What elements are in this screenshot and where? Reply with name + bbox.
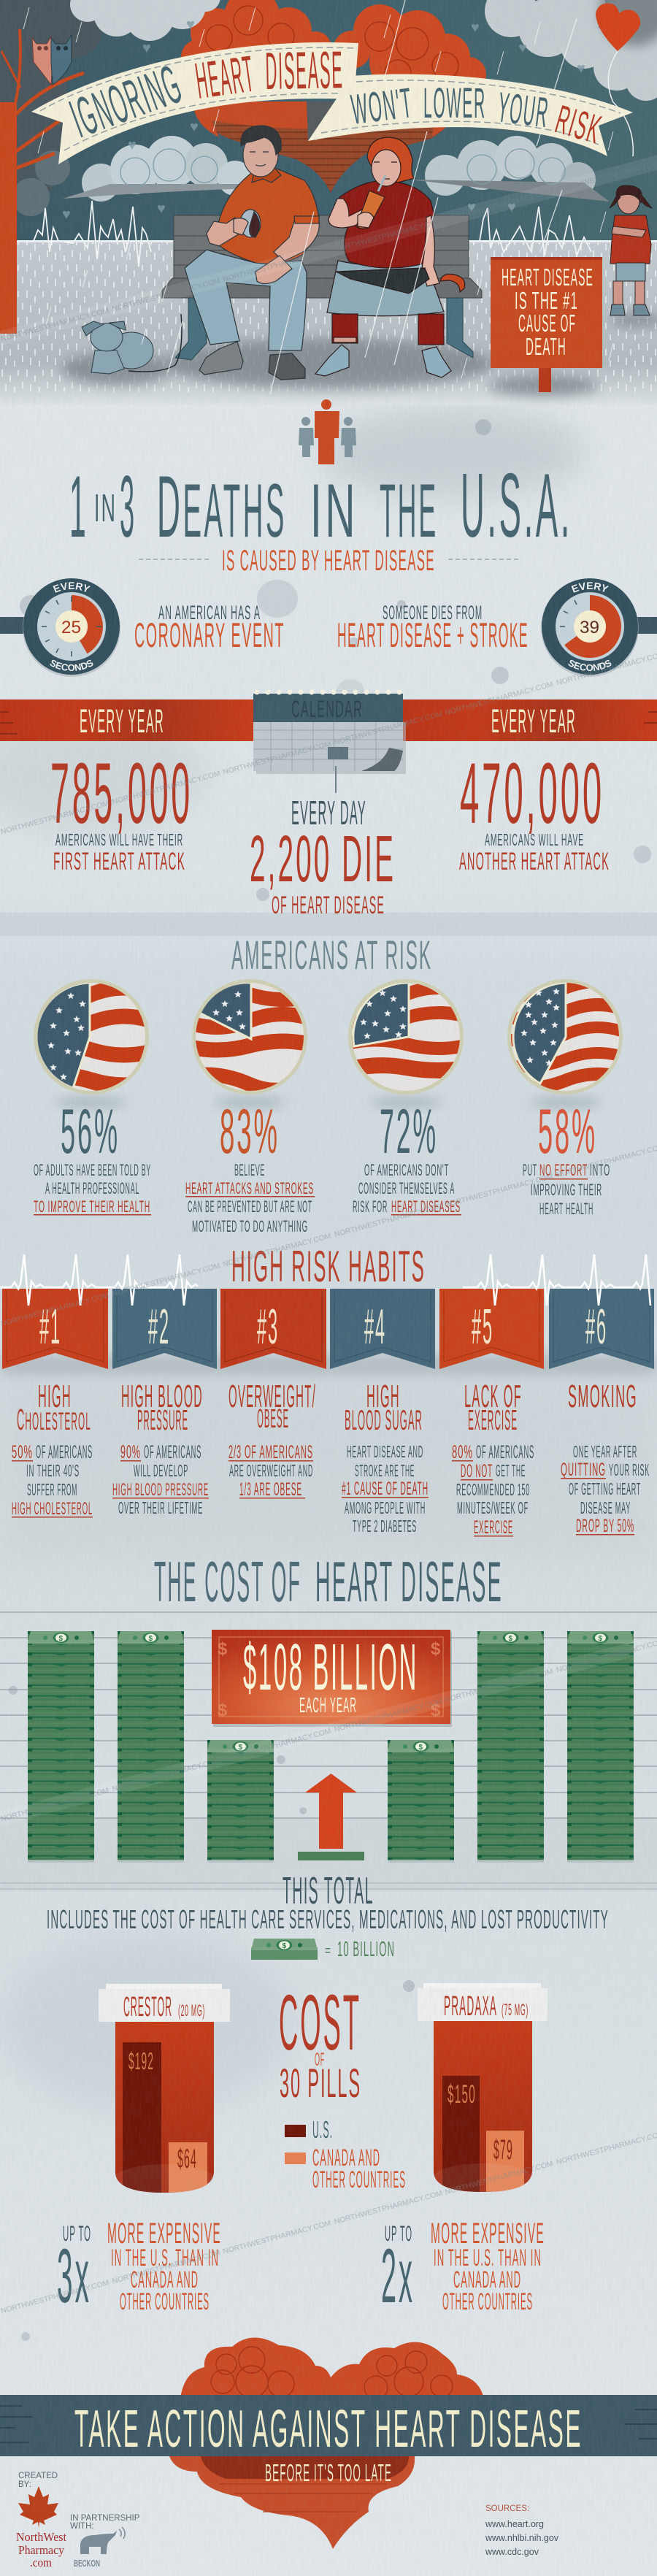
text: OF HEART DISEASE — [272, 892, 385, 919]
text: heart disease and stroke: SOMEONE DIES FROM — [383, 602, 483, 624]
text: CHOLESTEROL — [17, 1403, 91, 1436]
banner right: WON'T — [349, 79, 415, 134]
text: SUFFER FROM — [27, 1480, 77, 1499]
heading: 1 in 3 deaths in the USA: 1 — [69, 458, 88, 556]
text: HEART ATTACKS AND STROKES — [185, 1179, 314, 1197]
owls on branch — [32, 35, 72, 85]
hearts in sky: ♥ — [157, 201, 166, 217]
heading: 1 in 3 deaths in the USA: 3 — [120, 458, 137, 556]
text: PRESSURE — [137, 1405, 188, 1436]
text: ARE OVERWEIGHT AND — [229, 1461, 313, 1480]
heading: cost of 30 pills — [279, 1978, 361, 2106]
text: 30 PILLS — [280, 2060, 361, 2106]
habit: high cholesterol: IN THEIR 40'S — [26, 1461, 80, 1480]
watermark: NORTHWESTPHARMACY.COM — [111, 769, 221, 806]
text: coronary event — [134, 602, 285, 654]
ribbon #2: #2 — [148, 1299, 170, 1354]
heading: 1 in 3 deaths in the USA: THE — [380, 469, 438, 553]
stat: 58%: NO EFFORT — [539, 1161, 588, 1179]
ribbon #1: #1 — [39, 1299, 61, 1354]
red bill: 108 billion: $ — [431, 1639, 441, 1659]
text: TYPE 2 DIABETES — [353, 1517, 417, 1536]
sky — [0, 0, 657, 242]
red bill: 108 billion: $ — [218, 1639, 228, 1659]
woman with drink and umbrella — [315, 137, 465, 377]
watermark: NORTHWESTPHARMACY.COM — [222, 1727, 332, 1764]
text: FIRST HEART ATTACK — [53, 848, 185, 875]
hearts in sky: ♥ — [507, 199, 516, 215]
watermark: NORTHWESTPHARMACY.COM — [111, 1261, 221, 1298]
rain — [23, 0, 613, 394]
ribbon #6: #6 — [585, 1299, 607, 1354]
calendar: CALENDAR — [291, 696, 363, 722]
ribbon #1 — [2, 1289, 108, 1369]
text: up to 2x more expensive: CANADA AND — [453, 2266, 521, 2293]
text: HIGH CHOLESTEROL — [12, 1499, 93, 1519]
ribbon #5: #5 — [472, 1299, 493, 1354]
ribbon #4: #4 — [364, 1299, 386, 1354]
text: LACK OF — [464, 1379, 522, 1414]
watermark: NORTHWESTPHARMACY.COM — [0, 306, 110, 343]
credit: in partnership with beckon: BECKON — [74, 2558, 100, 2569]
watermark: NORTHWESTPHARMACY.COM — [111, 2248, 221, 2285]
hearts in sky: ♥ — [467, 199, 476, 215]
text: up to 2x more expensive: 2x — [381, 2234, 415, 2319]
sign: heart disease is the #1 cause of death — [491, 257, 602, 392]
sign: heart disease is the #1 cause of death: DEATH — [526, 333, 566, 360]
watermark: NORTHWESTPHARMACY.COM — [333, 2189, 443, 2226]
text: BLOOD SUGAR — [345, 1405, 423, 1436]
text: up to 3x more expensive: CANADA AND — [131, 2266, 199, 2293]
watermark: NORTHWESTPHARMACY.COM — [0, 1786, 110, 1823]
habit: high blood pressure: WILL DEVELOP — [134, 1461, 188, 1480]
pie chart flag: 56% — [26, 978, 157, 1108]
clouds middle left — [63, 136, 253, 202]
bottle: crestor — [99, 1984, 230, 2196]
stat: 470,000 another heart attack — [459, 745, 610, 875]
red band right — [403, 699, 657, 741]
stat: 83% — [185, 1097, 315, 1235]
park bench — [162, 215, 482, 360]
heart-shaped tree behind banner — [181, 0, 486, 193]
heading: 1 in 3 deaths in the USA — [69, 456, 572, 556]
watermark: NORTHWESTPHARMACY.COM — [444, 187, 554, 224]
text: OF AMERICANS — [36, 1442, 93, 1463]
ribbon #3 — [220, 1289, 326, 1369]
chart gridlines — [0, 1612, 657, 1818]
hearts in sky: ♥ — [186, 17, 195, 33]
heading: 1 in 3 deaths in the USA: IN — [310, 469, 358, 553]
text: INTO — [590, 1161, 610, 1179]
credit: created by northwest pharmacy: NorthWest — [16, 2530, 66, 2544]
stat: 72%: 72% — [380, 1097, 438, 1167]
legend: bill equals 10 billion — [251, 1938, 395, 1961]
habit: overweight obese: OBESE — [257, 1403, 289, 1433]
calendar — [253, 689, 406, 774]
text: AMERICANS WILL HAVE THEIR — [55, 830, 183, 849]
pie chart flag: 58% — [499, 978, 631, 1108]
pie chart flag: 83% — [184, 978, 315, 1108]
habit: lack of exercise: DO NOT — [461, 1461, 493, 1481]
bottle: crestor: $192 — [128, 2047, 154, 2074]
bottle: crestor: (20 MG) — [178, 2001, 205, 2020]
watermark: NORTHWESTPHARMACY.COM — [111, 276, 221, 313]
stat: 72%: RISK FOR — [353, 1197, 388, 1216]
watermark: NORTHWESTPHARMACY.COM — [444, 1667, 554, 1704]
man eating doughnut — [185, 126, 319, 380]
bottle: pradaxa: PRADAXA — [444, 1991, 497, 2022]
credit: created by northwest pharmacy: BY: — [18, 2480, 31, 2489]
bottle: crestor: CRESTOR — [123, 1992, 172, 2023]
watermark: NORTHWESTPHARMACY.COM — [444, 680, 554, 717]
text: OTHER COUNTRIES — [120, 2288, 210, 2315]
ribbon #3: #3 — [257, 1299, 279, 1354]
text: GET THE — [496, 1461, 526, 1480]
text: HEART DISEASE AND — [347, 1442, 423, 1461]
ribbon #2 — [112, 1289, 217, 1369]
red bill: 108 billion: $ — [218, 1701, 228, 1720]
text: CONSIDER THEMSELVES A — [358, 1179, 455, 1197]
text: coronary event: AN AMERICAN HAS A — [158, 602, 261, 624]
hearts in sky: ♥ — [62, 207, 71, 223]
heading: cost of 30 pills: OF — [315, 2050, 325, 2070]
watermark: NORTHWESTPHARMACY.COM — [333, 1202, 443, 1239]
text: A HEALTH PROFESSIONAL — [45, 1179, 139, 1197]
text: #1 CAUSE OF DEATH — [342, 1479, 429, 1499]
credit: in partnership with beckon: WITH: — [70, 2522, 94, 2531]
text: OVERWEIGHT/ — [228, 1379, 316, 1414]
hearts in sky: ♥ — [128, 137, 137, 153]
text: up to 3x more expensive: UP TO — [63, 2222, 91, 2246]
text: EVERY DAY — [291, 794, 366, 832]
ground — [0, 241, 657, 405]
legend: bill equals 10 billion: = — [325, 1943, 331, 1959]
watermark: NORTHWESTPHARMACY.COM — [0, 799, 110, 836]
stat: 56% — [34, 1097, 151, 1216]
text: up to 3x more expensive — [57, 2217, 221, 2319]
red band left: EVERY YEAR — [80, 702, 164, 740]
red bill: 108 billion — [212, 1630, 452, 1727]
stat: 785,000 first heart attack — [50, 745, 193, 875]
legend: US vs Canada: U.S. — [312, 2116, 333, 2143]
clock: every 25 seconds: EVERY — [53, 582, 91, 593]
text: CORONARY EVENT — [134, 616, 285, 654]
stat: 2,200 die every day — [250, 794, 396, 919]
habit: high blood sugar: HIGH — [366, 1379, 400, 1414]
text: OF ADULTS HAVE BEEN TOLD BY — [34, 1161, 151, 1179]
hearts in sky: ♥ — [190, 119, 199, 135]
text: 785,000 — [50, 745, 193, 842]
banner right: YOUR — [495, 83, 552, 137]
habit: lack of exercise: EXERCISE — [474, 1517, 513, 1538]
clock: every 25 seconds: 25 — [61, 618, 81, 637]
clock: every 39 seconds: 39 — [580, 618, 599, 637]
watermark: NORTHWESTPHARMACY.COM — [0, 2278, 110, 2315]
red band left — [0, 699, 254, 741]
heartbeat lines — [34, 201, 591, 267]
credit: created by northwest pharmacy — [16, 2472, 66, 2569]
text: 1/3 ARE OBESE — [239, 1479, 302, 1500]
stat: 83%: BELIEVE — [234, 1161, 265, 1179]
text: HIGH BLOOD PRESSURE — [112, 1480, 209, 1500]
tree trunk and branches — [0, 29, 84, 334]
watermark: NORTHWESTPHARMACY.COM — [444, 2159, 554, 2196]
text: 2/3 OF AMERICANS — [228, 1442, 313, 1463]
habit: lack of exercise — [452, 1379, 534, 1538]
watermark: NORTHWESTPHARMACY.COM — [222, 2219, 332, 2256]
stat: 56%: 56% — [61, 1097, 120, 1167]
tree foliage — [0, 0, 114, 216]
text: COST — [279, 1978, 361, 2066]
credit: created by northwest pharmacy: Pharmacy — [18, 2543, 64, 2557]
ribbon #6 — [549, 1289, 654, 1369]
ground shadows — [62, 313, 657, 396]
hearts in sky — [62, 17, 585, 223]
heading: 1 in 3 deaths in the USA: IN — [94, 486, 117, 530]
watermark: NORTHWESTPHARMACY.COM — [222, 740, 332, 777]
red bill: 108 billion: EACH YEAR — [299, 1694, 357, 1717]
text: this total: THIS TOTAL — [283, 1870, 374, 1912]
ribbon #5 — [439, 1289, 544, 1369]
credit: created by northwest pharmacy: .com — [30, 2556, 52, 2569]
text: OF AMERICANS DON'T — [364, 1161, 449, 1179]
banner fold — [307, 101, 339, 141]
sign: heart disease is the #1 cause of death: CAUSE OF — [518, 310, 576, 337]
legend: US vs Canada: CANADA AND — [312, 2144, 380, 2171]
chart: money stacks — [28, 1631, 634, 1863]
clouds upper — [70, 0, 220, 41]
text: up to 2x more expensive: UP TO — [385, 2222, 412, 2246]
text: OTHER COUNTRIES — [312, 2166, 406, 2193]
text: CAN BE PREVENTED BUT ARE NOT — [188, 1197, 312, 1216]
heartbeat line across ribbons — [0, 1254, 650, 1306]
girl with pigtails — [610, 185, 652, 315]
text: MOTIVATED TO DO ANYTHING — [192, 1217, 308, 1235]
text: up to 3x more expensive: 3x — [57, 2234, 91, 2319]
habit: high cholesterol: HIGH — [38, 1379, 72, 1414]
text: up to 2x more expensive — [381, 2217, 545, 2319]
habit: high blood sugar — [342, 1379, 429, 1536]
text: HIGH BLOOD — [121, 1379, 203, 1414]
heading: the cost of heart disease: THE COST OF — [154, 1549, 301, 1614]
watermark: NORTHWESTPHARMACY.COM — [222, 1232, 332, 1269]
watermark: NORTHWESTPHARMACY.COM — [0, 1291, 110, 1328]
text: IN THE U.S. THAN IN — [111, 2245, 219, 2271]
clouds middle right — [410, 136, 610, 202]
habit: overweight obese — [228, 1379, 316, 1500]
text: OF AMERICANS — [476, 1442, 534, 1463]
credit: in partnership with beckon — [70, 2514, 140, 2569]
text: OF AMERICANS — [144, 1442, 201, 1463]
heading: 1 in 3 deaths in the USA: DEATHS — [157, 458, 287, 556]
text: heart disease and stroke — [337, 602, 529, 654]
pie chart flag: 72% — [340, 978, 472, 1108]
bottle: crestor: $64 — [177, 2144, 197, 2174]
text: STROKE ARE THE — [355, 1461, 415, 1480]
arrow up — [305, 1774, 357, 1849]
sources: SOURCES: — [485, 2504, 529, 2513]
stat: 58%: PUT — [523, 1161, 537, 1179]
balloon — [596, 4, 640, 156]
credit: created by northwest pharmacy: CREATED — [18, 2472, 58, 2480]
bottle: pradaxa — [418, 1983, 548, 2193]
banner right — [308, 74, 633, 156]
watermark: NORTHWESTPHARMACY.COM — [222, 247, 332, 284]
text: AMONG PEOPLE WITH — [345, 1498, 426, 1517]
text: EXERCISE — [468, 1405, 518, 1436]
sources: www.heart.org — [485, 2519, 544, 2529]
icon: one in three people — [299, 399, 356, 464]
hearts in sky: ♥ — [518, 40, 527, 56]
habit: high blood pressure — [112, 1379, 209, 1517]
ribbon #4 — [330, 1289, 435, 1369]
text: OVER THEIR LIFETIME — [118, 1498, 203, 1517]
watermark: NORTHWESTPHARMACY.COM — [444, 1172, 554, 1209]
red bill: 108 billion: $ — [431, 1701, 441, 1720]
clock: every 25 seconds — [0, 578, 120, 677]
text: this total — [47, 1870, 609, 1934]
text: RECOMMENDED 150 — [456, 1480, 530, 1499]
sources: www.nhlbi.nih.gov — [485, 2533, 559, 2543]
hearts in sky: ♥ — [142, 40, 151, 56]
legend: US vs Canada — [285, 2116, 406, 2193]
banner left: HEART — [192, 45, 258, 110]
sign: heart disease is the #1 cause of death: IS THE #1 — [515, 287, 578, 314]
stat: 58% — [523, 1097, 610, 1218]
ribbon row shadow — [0, 1354, 657, 1375]
text: TO IMPROVE THEIR HEALTH — [34, 1197, 150, 1216]
bottle: pradaxa: $150 — [447, 2080, 476, 2109]
stat: 72% — [353, 1097, 461, 1216]
bottle: pradaxa: $79 — [493, 2135, 513, 2166]
banner left — [31, 41, 358, 164]
clock: every 39 seconds: EVERY — [571, 582, 609, 593]
hero illustration: rainy park scene — [0, 0, 657, 405]
bottle: pradaxa: (75 MG) — [502, 2001, 529, 2019]
bottom heart — [169, 2337, 484, 2549]
clock: every 39 seconds: SECONDS — [568, 660, 612, 671]
habit: high blood pressure: 90% — [120, 1442, 141, 1463]
hero illustration: rainy park scene: DISEASE — [265, 41, 344, 101]
watermark: NORTHWESTPHARMACY.COM — [333, 217, 443, 254]
text: HEART DISEASES — [391, 1197, 461, 1216]
text: MINUTES/WEEK OF — [457, 1498, 529, 1517]
habit: high cholesterol — [12, 1379, 93, 1519]
dog on a leash — [82, 314, 182, 374]
banner right: LOWER — [423, 80, 486, 127]
text: 2,200 DIE — [250, 823, 396, 896]
habit: smoking: QUITTING — [561, 1460, 606, 1480]
sources — [485, 2504, 559, 2557]
watermark: NORTHWESTPHARMACY.COM — [333, 710, 443, 747]
text: BEFORE IT'S TOO LATE — [265, 2459, 392, 2486]
sources: www.cdc.gov — [485, 2547, 539, 2557]
hearts in sky: ♥ — [471, 20, 480, 36]
watermark: NORTHWESTPHARMACY.COM — [111, 1756, 221, 1793]
habit: smoking — [561, 1379, 650, 1536]
habit: high cholesterol: 50% — [12, 1442, 33, 1463]
habit: lack of exercise: 80% — [452, 1442, 473, 1463]
hearts in sky: ♥ — [577, 61, 585, 77]
stat: 83%: 83% — [220, 1097, 280, 1167]
clock: every 39 seconds — [541, 578, 657, 677]
text: MORE EXPENSIVE — [107, 2217, 221, 2250]
clock: every 25 seconds: SECONDS — [50, 660, 93, 671]
watermark: NORTHWESTPHARMACY.COM — [333, 1697, 443, 1734]
credit: in partnership with beckon: IN PARTNERSHIP — [70, 2514, 140, 2523]
text: 10 BILLION — [337, 1938, 395, 1961]
